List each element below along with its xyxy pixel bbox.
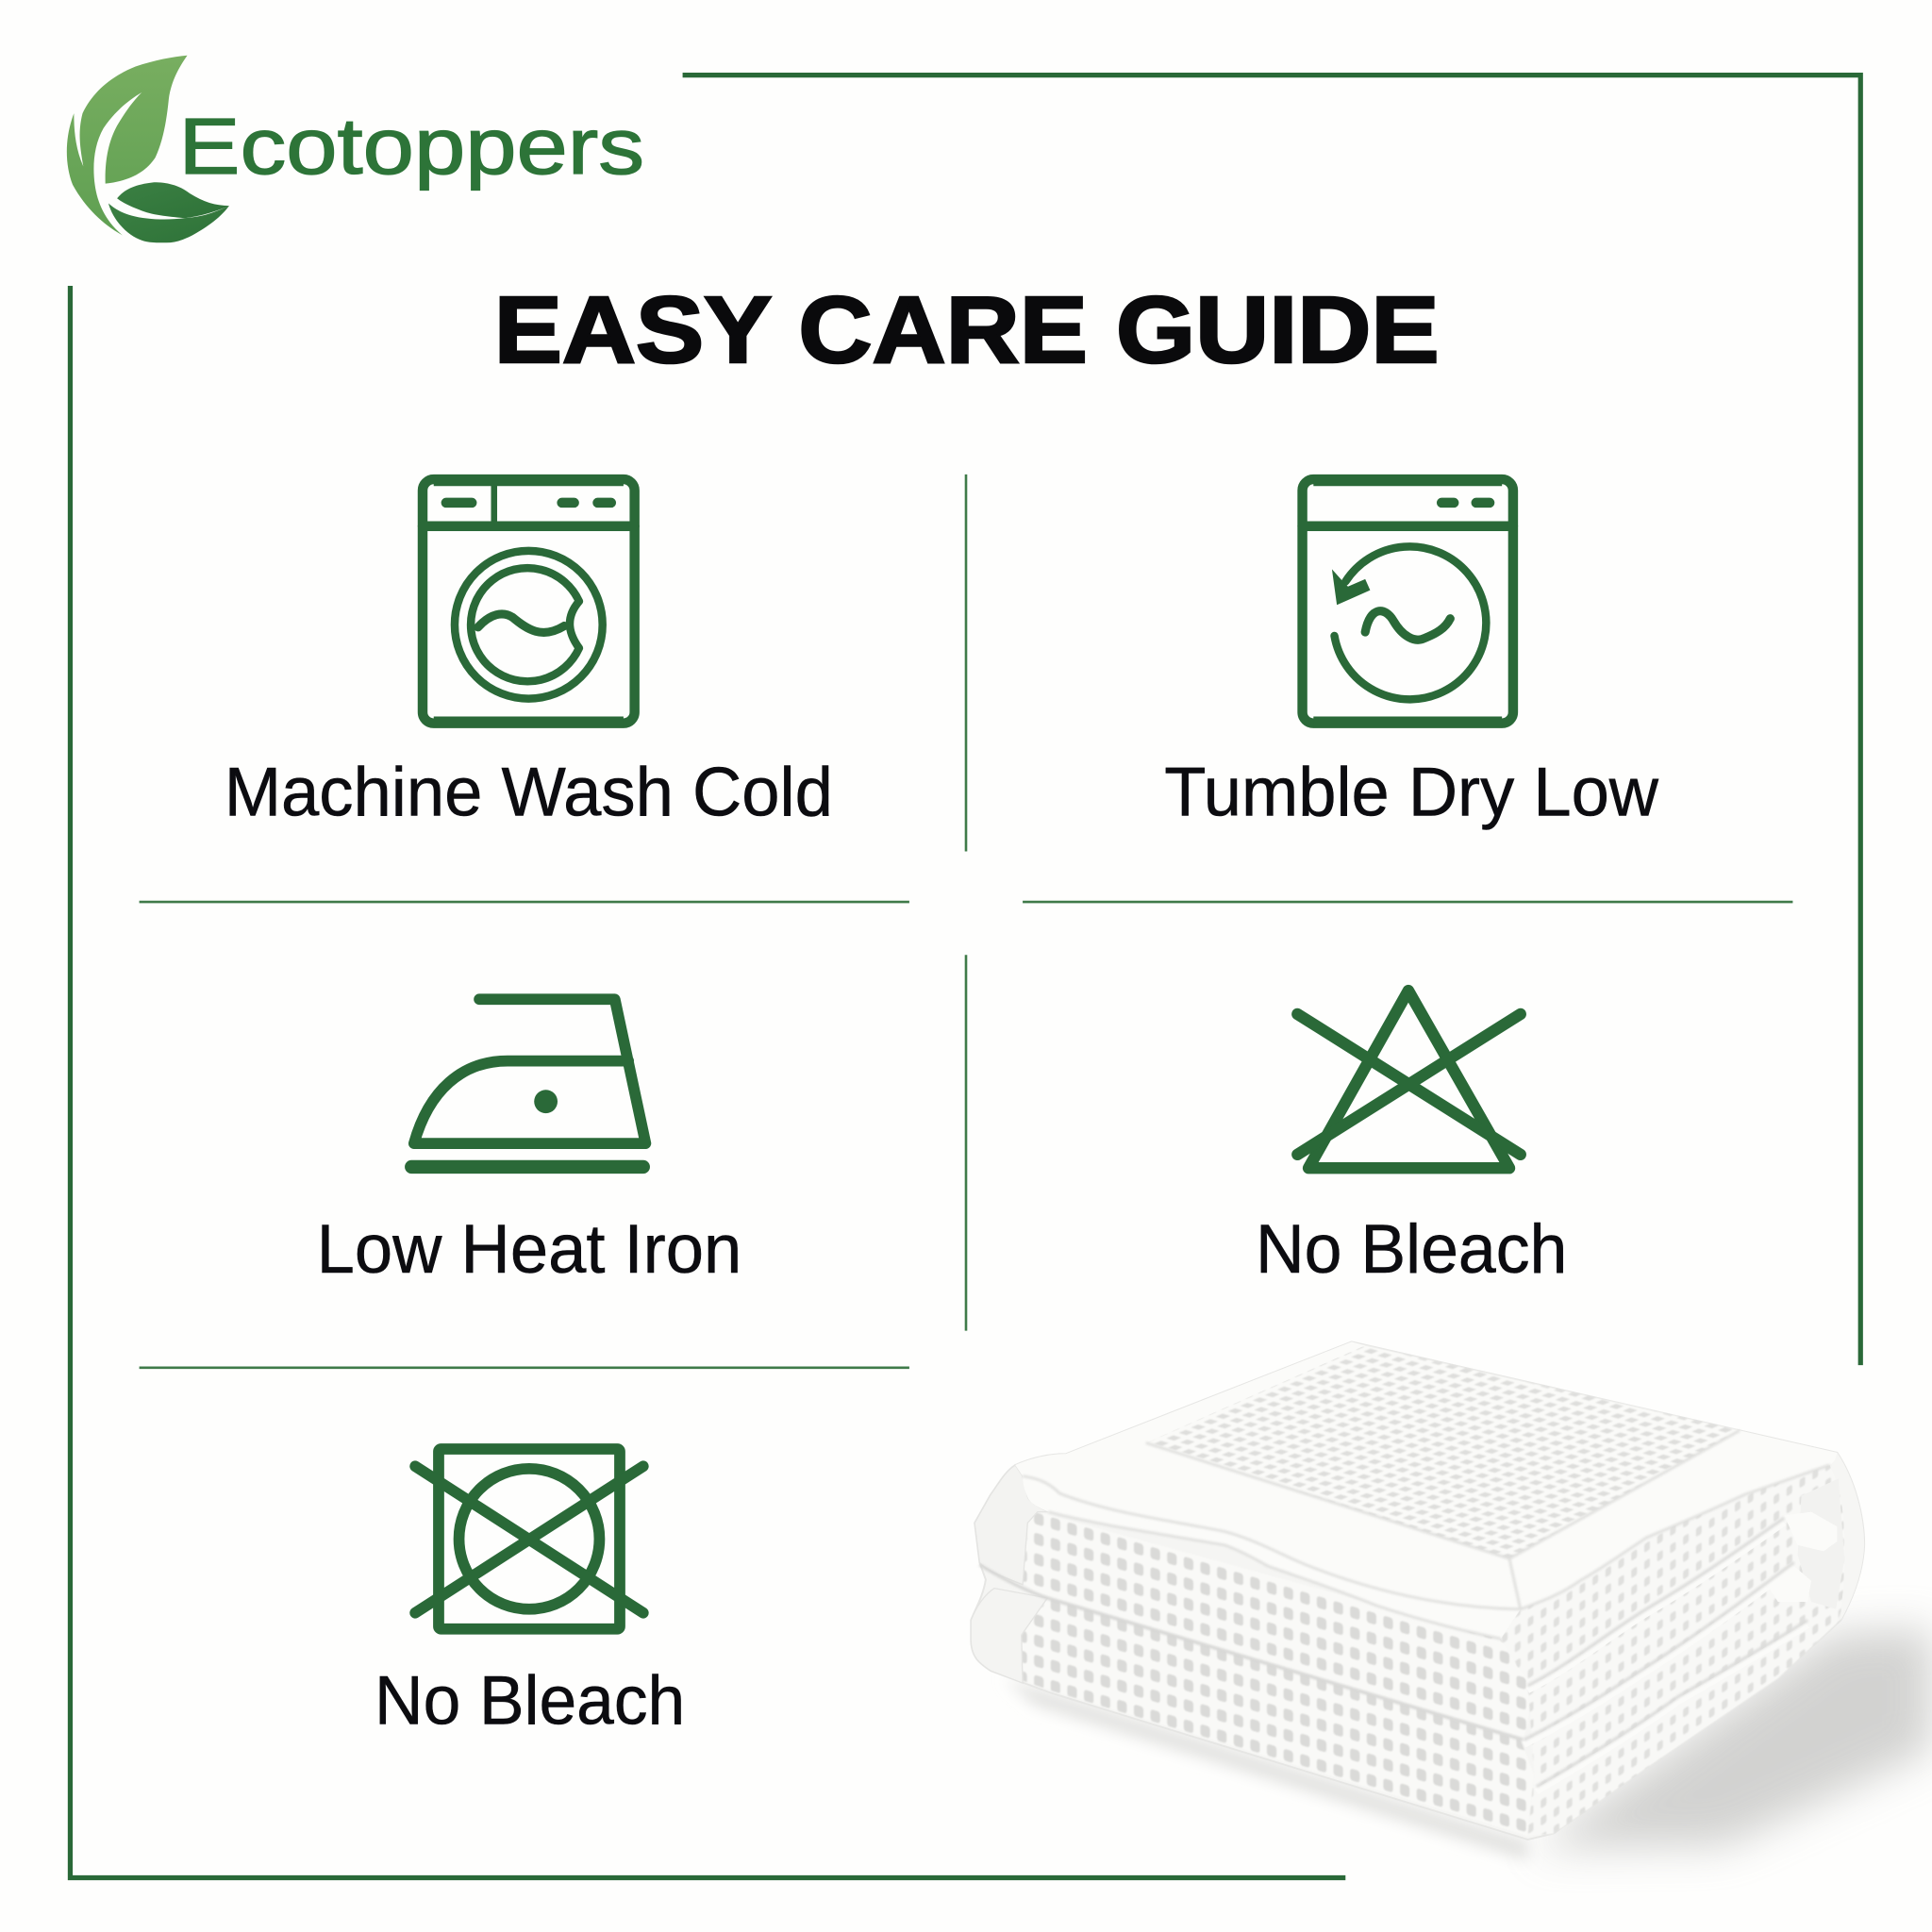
icon: washing machine <box>423 479 635 724</box>
right fold details <box>1524 1453 1864 1791</box>
left hem upper <box>974 1465 1049 1585</box>
logo wordmark: Ecotoppers <box>178 101 644 191</box>
upper roll front face <box>1023 1512 1529 1738</box>
roll separation crease <box>979 1565 1523 1740</box>
panel: crossed wash symbol <box>375 1449 685 1739</box>
icon: iron <box>411 999 645 1167</box>
panel: no bleach <box>1256 991 1567 1288</box>
icon: large light green leaf <box>67 56 188 235</box>
product image: folded white waffle blanket <box>971 1341 1932 1860</box>
icon: crossed triangle <box>1297 991 1521 1168</box>
blanket shadow right <box>1534 1629 1932 1848</box>
panel: low heat iron <box>317 999 741 1288</box>
left hem lower <box>971 1589 1047 1683</box>
label: tumble dry low: Tumble Dry Low <box>1164 755 1658 831</box>
label: low heat iron: Low Heat Iron <box>317 1211 741 1288</box>
blanket silhouette <box>971 1341 1864 1840</box>
label: no bleach: No Bleach <box>375 1662 685 1739</box>
flap satin border <box>1015 1341 1837 1639</box>
icon: crossed circle in square <box>415 1449 643 1629</box>
flap fold creases <box>1023 1430 1830 1639</box>
label: machine wash cold: Machine Wash Cold <box>225 755 833 831</box>
title: EASY CARE GUIDE <box>494 277 1440 383</box>
icon: dark green leaves <box>108 182 229 242</box>
label: no bleach: No Bleach <box>1256 1211 1567 1288</box>
panel: tumble dry low <box>1164 479 1658 831</box>
lower roll front face <box>1022 1598 1534 1836</box>
top flap waffle face <box>1146 1344 1740 1558</box>
blanket shadow front <box>1004 1678 1528 1860</box>
section dividers <box>140 475 1792 1368</box>
right side face <box>1501 1465 1854 1836</box>
icon: tumble dryer <box>1303 479 1513 724</box>
panel: machine wash cold <box>225 479 833 831</box>
logo: Ecotoppers <box>67 56 644 242</box>
